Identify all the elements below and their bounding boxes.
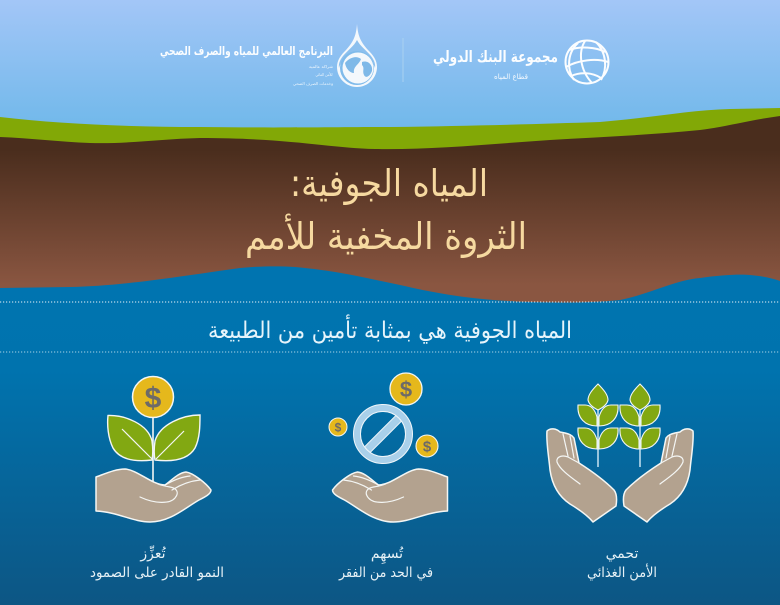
water sector label: قطاع المياه [494, 72, 528, 81]
programme name: البرنامج العالمي للمياه والصرف الصحي [160, 44, 333, 59]
icon: no sign with coins on hand [329, 373, 448, 522]
groundwater [0, 266, 780, 605]
caption: تُسهِم [371, 546, 404, 564]
title [245, 162, 527, 258]
icon: wheat in cupped hands [547, 384, 693, 522]
caption: تحمي [606, 546, 638, 562]
icon: no sign with coins on hand: $ [423, 438, 432, 456]
programme tagline: شراكة عالمية [309, 64, 334, 69]
caption: الأمن الغذائي [587, 563, 657, 581]
icon: World Bank globe [566, 40, 608, 84]
caption: في الحد من الفقر [338, 565, 433, 581]
dotted divider bottom [0, 351, 780, 353]
caption [90, 545, 224, 581]
dotted divider top [0, 301, 780, 303]
icon: plant with coin on hand: $ [145, 382, 162, 415]
caption: النمو القادر على الصمود [90, 565, 224, 581]
programme tagline [293, 64, 334, 86]
logo: Global Water and Sanitation Programme [160, 24, 377, 87]
logo: World Bank Group [433, 40, 608, 84]
programme tagline: للأمن المائي [316, 72, 332, 77]
title: المياه الجوفية: [290, 162, 488, 205]
grass strip [0, 108, 780, 149]
icon: plant with coin on hand [96, 376, 211, 522]
subtitle: المياه الجوفية هي بمثابة تأمين من الطبيعة [208, 314, 572, 344]
caption [338, 546, 433, 581]
panel: resilient growth [90, 376, 224, 581]
caption: تُعزِّز [139, 545, 166, 562]
caption [587, 546, 657, 581]
icon: no sign with coins on hand: $ [400, 377, 412, 402]
panel: food security [547, 384, 693, 581]
programme tagline: وخدمات الصرف الصحي [293, 81, 333, 86]
icon: no sign with coins on hand: $ [335, 420, 342, 434]
title: الثروة المخفية للأمم [245, 213, 527, 258]
logo divider [402, 38, 404, 82]
sky background [0, 0, 780, 150]
icon: water drop globe [337, 24, 377, 87]
World Bank name: مجموعة البنك الدولي [433, 48, 558, 67]
soil layer [0, 112, 780, 305]
panel: poverty reduction [329, 373, 448, 581]
